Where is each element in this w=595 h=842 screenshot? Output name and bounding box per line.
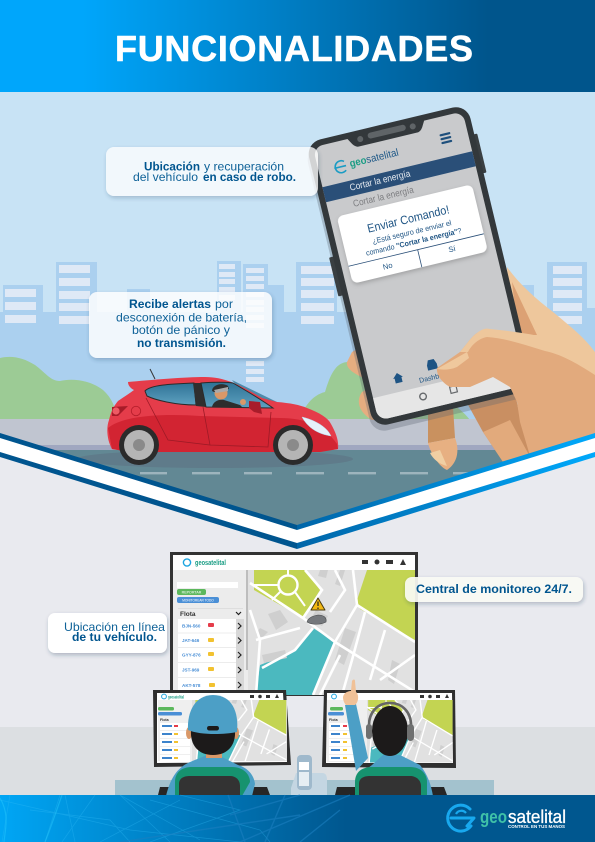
sub text: Cortar la energía: [352, 184, 415, 210]
lower index finger: [428, 407, 455, 443]
callout: monitoring center: Central de monitoreo 24/7.: [416, 582, 572, 596]
phone app logo: [333, 147, 400, 174]
headset: [369, 703, 411, 728]
road: [0, 419, 502, 525]
footer logo: geo: [480, 807, 507, 827]
side panel: [177, 570, 248, 692]
fleet rows: JAT-646: [182, 638, 200, 643]
nav icons: Dashboard: [419, 370, 454, 385]
hand behind phone: [347, 267, 595, 470]
phone shadow: [305, 110, 534, 434]
monitor toolbar icons: [362, 559, 406, 565]
monitor logo: [183, 559, 226, 567]
keyboards: [158, 787, 447, 795]
side panel: REPORTAR: [182, 591, 202, 595]
bar text: Cortar la energía: [349, 168, 412, 194]
side panel: MONITOREAR TODO: [182, 598, 214, 602]
city skyline: [3, 261, 595, 382]
callout: theft recovery: del vehículo: [133, 170, 198, 184]
shirt: [166, 755, 255, 796]
windows: [145, 383, 196, 405]
right chair: [355, 767, 427, 796]
callout: theft recovery: y recuperación: [204, 160, 284, 174]
front wheel: [273, 425, 313, 465]
phone frame: [306, 104, 535, 428]
mirror: [249, 401, 262, 414]
bottom nav bar: [373, 362, 528, 421]
tail light: [112, 406, 128, 416]
left monitor sidebar: Flota: [160, 718, 170, 722]
callout: alerts: desconexión de batería,: [116, 310, 247, 324]
callout: online location: Ubicación en línea: [64, 620, 165, 634]
door lines: [146, 398, 271, 447]
logo icon: [448, 805, 474, 831]
nav icons: [391, 355, 457, 406]
desk telephone: [291, 755, 327, 795]
callout: alerts: no transmisión.: [137, 336, 226, 350]
monitor logo: geosatelital: [195, 560, 226, 567]
lower palm: [467, 393, 532, 462]
command dialog: Enviar Comando!: [366, 202, 451, 236]
back of hand: [507, 267, 595, 361]
back fingers: [346, 350, 362, 378]
notch: [347, 120, 427, 149]
callout: theft recovery: en caso de robo.: [203, 170, 296, 184]
chair: [175, 767, 250, 796]
neck: [206, 750, 222, 758]
rear wheel: [119, 425, 159, 465]
street scene background: [0, 92, 595, 540]
lower wall: [0, 727, 595, 797]
warning sign: [311, 598, 325, 610]
phone app logo: geo: [348, 154, 368, 170]
callout: alerts: botón de pánico y: [132, 323, 230, 337]
car body: [107, 377, 338, 452]
command dialog: No: [382, 261, 393, 272]
callout: monitoring center: [405, 577, 583, 602]
phone screen: [313, 111, 528, 421]
menu icon: [439, 132, 452, 144]
operator left: [166, 695, 255, 796]
bushes: [0, 357, 470, 420]
hair: [191, 730, 235, 755]
right monitor sidebar: Flota: [329, 718, 339, 722]
callout: online location: [48, 613, 167, 653]
footer logo: CONTROL EN TUS MANOS: [508, 824, 565, 829]
antenna: [150, 369, 155, 379]
right workstation monitor: [322, 690, 456, 768]
side panel: Flota: [180, 611, 196, 618]
side buttons: [309, 134, 507, 296]
right head: [372, 706, 408, 756]
main monitor: [170, 552, 418, 696]
phone app logo: satelital: [365, 147, 400, 166]
command dialog: [337, 184, 488, 284]
ears: [186, 727, 192, 739]
command dialog: Sí: [447, 244, 457, 254]
title: FUNCIONALIDADES: [115, 28, 473, 69]
callout: alerts: Recibe alertas: [129, 297, 211, 311]
footer band: [0, 795, 595, 842]
raised hand: [343, 680, 358, 705]
fleet rows: BJN-560: [182, 624, 201, 628]
fleet rows: GYY-876: [182, 652, 201, 658]
red car: [107, 369, 338, 465]
footer logo: [448, 805, 566, 831]
windshield: [232, 380, 277, 402]
cap: [188, 695, 237, 734]
raised arm: [345, 704, 368, 771]
header banner: [0, 0, 595, 92]
smartphone: [302, 103, 538, 434]
chevron divider: [0, 433, 595, 549]
thumb over phone: [437, 329, 595, 456]
command dialog: comando "Cortar la energía"?: [365, 226, 462, 258]
right shirt: [355, 755, 433, 796]
city map: [248, 570, 415, 695]
operator right: [343, 680, 433, 796]
callout: online location: de tu vehículo.: [72, 630, 157, 644]
driver: [212, 384, 246, 408]
fleet rows: [178, 619, 244, 692]
blue title bar: [322, 151, 476, 202]
command dialog: ¿Está seguro de enviar el: [371, 218, 453, 246]
left workstation monitor: [153, 690, 291, 767]
car marker: [307, 615, 326, 624]
callout: alerts: por: [215, 297, 233, 311]
headlight: [302, 417, 331, 436]
footer map pattern: [0, 795, 270, 842]
fleet rows: JST-969: [182, 668, 200, 672]
fleet rows: AKT-578: [182, 683, 201, 688]
callout: alerts: [89, 292, 272, 358]
callout: theft recovery: [106, 147, 318, 196]
callout: theft recovery: Ubicación: [144, 160, 200, 174]
right monitor logo: [332, 694, 336, 699]
footer logo: satelital: [508, 807, 566, 827]
left monitor logo: geosatelital: [168, 694, 184, 700]
desk: [115, 755, 494, 796]
monitor header: [173, 555, 415, 570]
